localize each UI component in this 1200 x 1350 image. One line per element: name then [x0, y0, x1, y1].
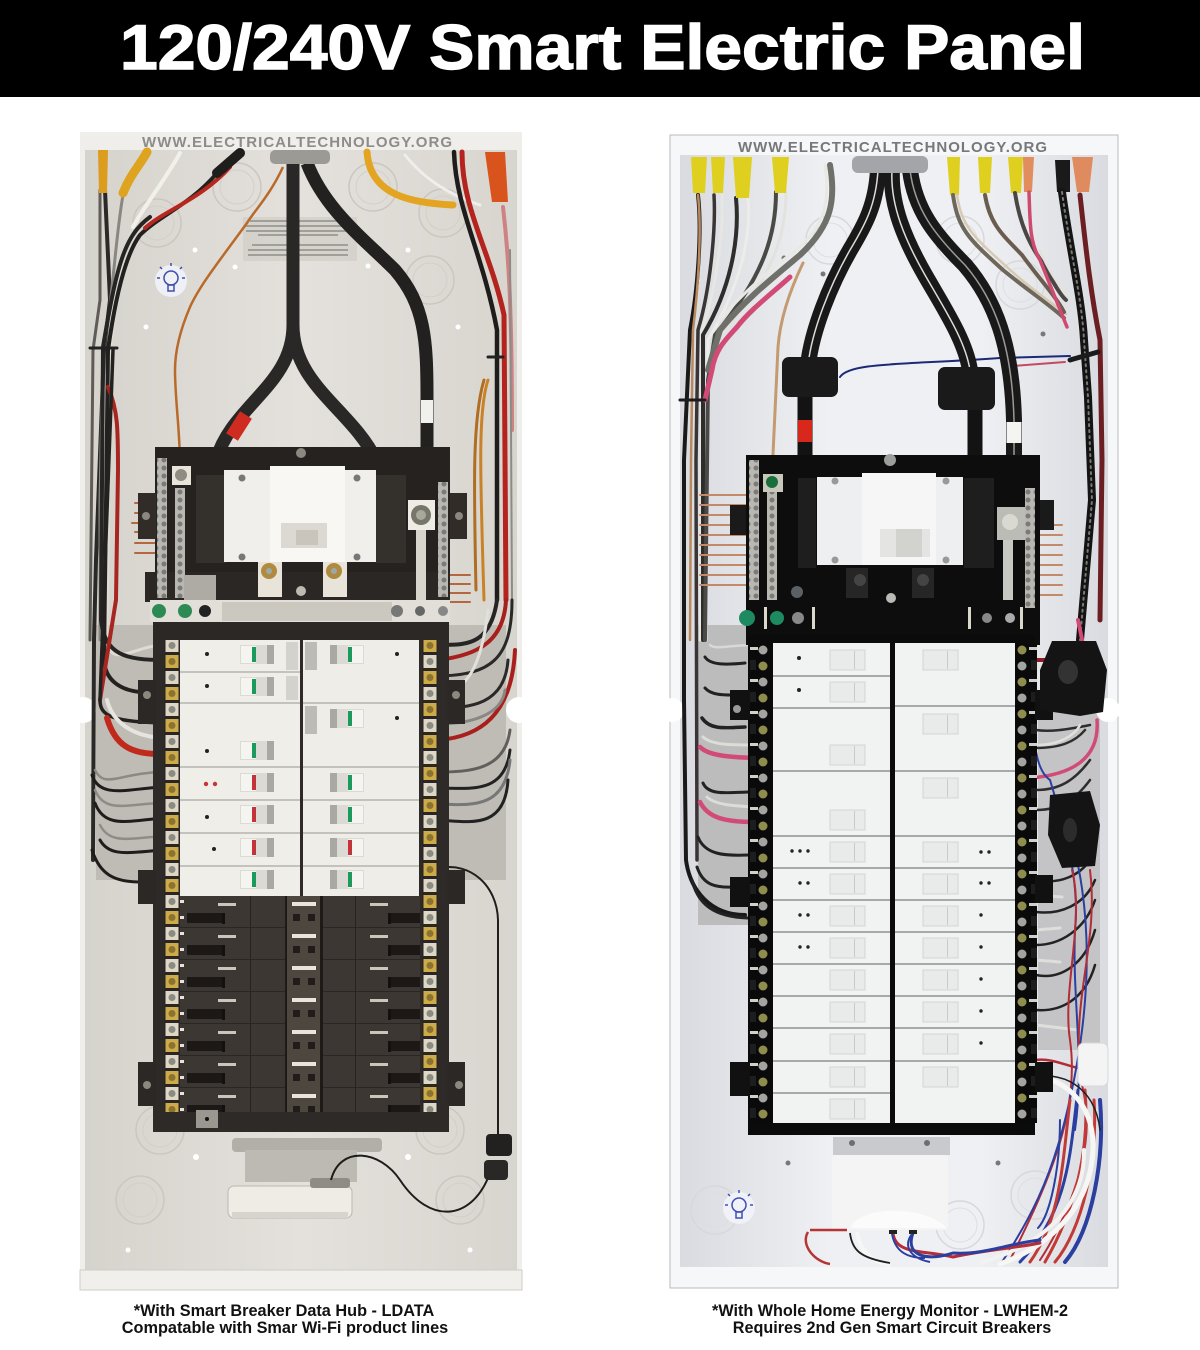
smart breakers right column — [895, 643, 1015, 1123]
warning label — [243, 217, 357, 261]
yellow wire nuts left — [691, 157, 789, 198]
icon: light bulb logo — [155, 263, 187, 297]
standard black breakers — [180, 896, 420, 1128]
panel enclosure — [660, 135, 1120, 1288]
main breaker — [224, 466, 376, 562]
service entrance cables — [805, 170, 1014, 460]
conduit connector — [270, 150, 330, 164]
panel enclosure — [70, 132, 532, 1290]
caption right: Requires 2nd Gen Smart Circuit Breakers — [733, 1319, 1051, 1337]
title text: 120/240V Smart Electric Panel — [120, 13, 1085, 83]
main breaker — [817, 473, 963, 565]
yellow and orange wire nuts right — [947, 157, 1093, 195]
ferrite sensor — [484, 1134, 512, 1180]
smart breakers left column — [773, 643, 890, 1123]
current transformer clamps on main cables — [782, 357, 995, 410]
right wire bundle — [840, 192, 1102, 1265]
conduit connector — [852, 156, 928, 173]
neutral bus bar — [150, 600, 450, 622]
icon: light bulb logo — [723, 1190, 755, 1224]
caption left — [122, 1302, 448, 1337]
watermark: WWW.ELECTRICALTECHNOLOGY.ORG — [142, 134, 452, 151]
service entrance cables — [175, 163, 427, 466]
yellow wire nut — [98, 150, 108, 193]
main breaker assembly — [138, 447, 467, 622]
panel: right smart panel with energy monitor — [660, 135, 1120, 1288]
caption right: *With Whole Home Energy Monitor - LWHEM-2 — [712, 1302, 1068, 1320]
breaker base and terminal strips — [730, 635, 1053, 1135]
caption left: Compatable with Smar Wi-Fi product lines — [122, 1319, 448, 1337]
smart breaker data hub LDATA — [228, 1138, 488, 1218]
smart breakers white left — [180, 640, 300, 896]
breaker base and terminal strips — [138, 622, 465, 1132]
smart breakers white right — [303, 640, 419, 896]
watermark: WWW.ELECTRICALTECHNOLOGY.ORG — [738, 139, 1047, 156]
caption right — [712, 1302, 1068, 1337]
main breaker assembly — [730, 454, 1054, 645]
left wire bundle — [680, 165, 1062, 918]
right wire bundle — [367, 152, 515, 1135]
title banner — [0, 0, 1200, 97]
left wire bundle — [90, 152, 470, 882]
orange wire nut — [485, 152, 508, 202]
caption left: *With Smart Breaker Data Hub - LDATA — [134, 1302, 434, 1320]
current transformer sensors — [1040, 641, 1107, 868]
whole home energy monitor LWHEM-2 — [806, 1137, 950, 1265]
white ring sensor — [1078, 1043, 1108, 1086]
panel: left smart panel with LDATA hub — [70, 132, 532, 1290]
